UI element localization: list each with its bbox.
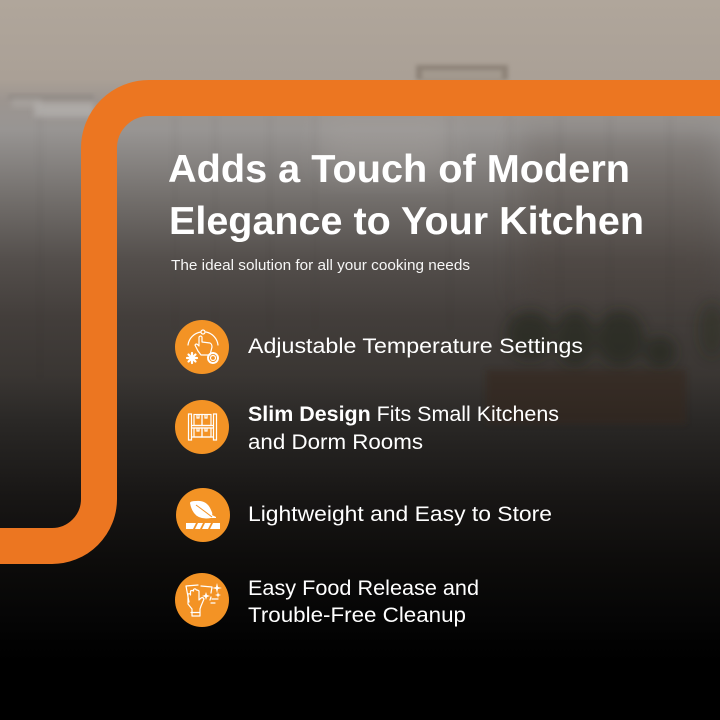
feature: lightweight (176, 488, 552, 542)
plant foliage (506, 302, 720, 368)
icon: storage shelf (175, 400, 229, 454)
label: Adjustable Temperature Settings (248, 335, 583, 358)
feature: adjustable temperature (175, 320, 583, 374)
feature: slim design (175, 400, 559, 454)
feature: slim design: and Dorm Rooms (248, 431, 423, 454)
label: Slim Design Fits Small Kitchens (248, 403, 559, 426)
subtitle: The ideal solution for all your cooking needs (171, 258, 470, 274)
icon: touch dial with snowflake and gear (175, 320, 229, 374)
feature: easy cleanup (175, 573, 479, 627)
orange frame band (0, 98, 720, 546)
title: Adds a Touch of Modern (168, 148, 630, 191)
icon: gloved hand wiping (175, 573, 229, 627)
title (168, 148, 644, 243)
feature: easy cleanup: Trouble-Free Cleanup (248, 604, 466, 627)
icon: leaf on scale (176, 488, 230, 542)
label: Easy Food Release and (248, 577, 479, 600)
label: Lightweight and Easy to Store (248, 503, 552, 526)
title: Elegance to Your Kitchen (169, 200, 644, 243)
